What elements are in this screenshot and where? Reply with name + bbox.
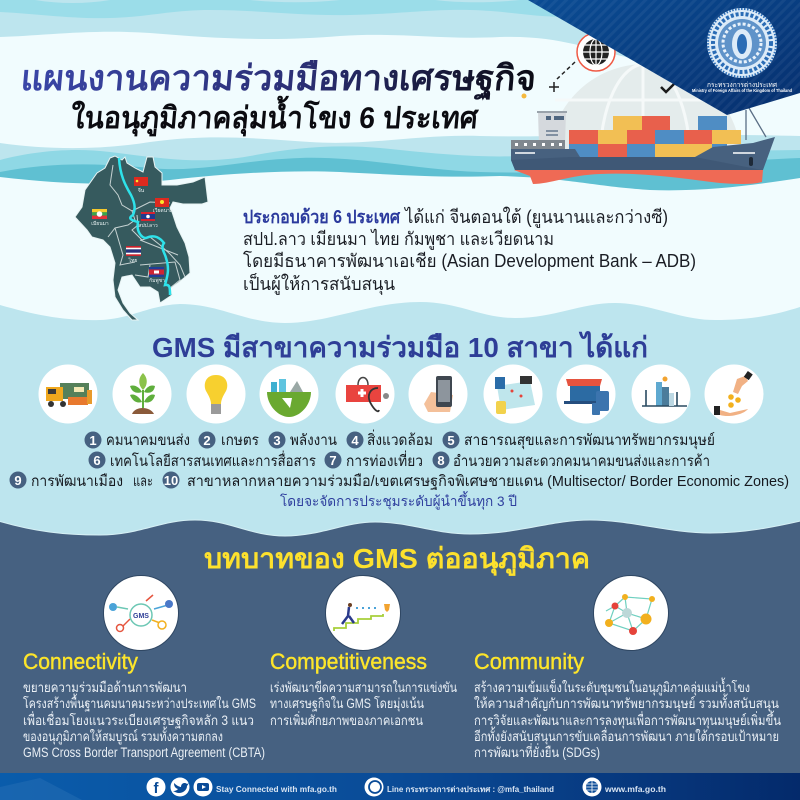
website: www.mfa.go.th	[604, 785, 666, 794]
ministry name	[692, 82, 792, 93]
icon: check	[661, 84, 674, 92]
top waves	[0, 0, 800, 60]
icon: health	[336, 364, 394, 424]
icon: tourism	[484, 364, 542, 424]
competitiveness body	[270, 679, 457, 728]
ministry seal	[707, 8, 777, 78]
yellow dot	[522, 94, 526, 98]
icon: urban	[632, 364, 690, 424]
ship	[511, 108, 775, 184]
community body	[474, 677, 781, 760]
competitiveness body: การเพิ่มศักยภาพของภาคเอกชน	[270, 711, 423, 728]
line 1: 4	[351, 433, 359, 448]
summit note: โดยจะจัดการประชุมระดับผู้นำขึ้นทุก 3 ปี	[280, 491, 517, 510]
line 1	[84, 429, 715, 450]
line 1: เกษตร	[221, 432, 259, 449]
connectivity body: ขยายความร่วมมือด้านการพัฒนา	[23, 680, 187, 695]
connectivity body	[23, 680, 265, 760]
panel: community	[474, 576, 781, 760]
ship bridge	[511, 111, 567, 149]
icon: line	[364, 778, 384, 796]
icon: globe badge	[577, 33, 615, 71]
flag: China	[134, 177, 148, 186]
icon: trade	[556, 364, 616, 424]
connector dashes	[549, 62, 575, 92]
line 2	[88, 450, 710, 470]
line 3: สาขาหลากหลายความร่วมมือ/เขตเศรษฐกิจพิเศษชายแดน (Multisector/ Border Economic Zones)	[187, 473, 789, 490]
map of GMS: จีน	[138, 187, 145, 194]
flag: Laos	[141, 212, 155, 221]
line 1: 1	[89, 433, 97, 448]
sector icons	[38, 364, 764, 424]
line 3: 10	[164, 473, 178, 488]
borders	[108, 165, 185, 288]
title: community: Community	[474, 649, 584, 674]
connectivity body: ของอนุภูมิภาคให้สมบูรณ์ รวมทั้งความตกลง	[23, 726, 223, 745]
line 1: 3	[273, 433, 281, 448]
connectivity body: GMS Cross Border Transport Agreement (CBTA)	[23, 745, 265, 760]
map of GMS: สปป.ลาว	[138, 223, 158, 229]
icon: facebook	[146, 778, 166, 797]
icon: climbing to trophy	[326, 576, 400, 650]
line 2: เทคโนโลยีสารสนเทศและการสื่อสาร	[110, 450, 316, 470]
icon: network	[104, 576, 178, 650]
icon: youtube	[194, 778, 212, 796]
connectivity body: เพื่อเชื่อมโยงแนวระเบียงเศรษฐกิจหลัก 3 แนว	[23, 711, 254, 729]
title: แผนงานความร่วมมือทางเศรษฐกิจ	[19, 59, 538, 101]
title: connectivity: Connectivity	[23, 649, 138, 674]
dark section	[0, 520, 800, 785]
line 2: การท่องเที่ยว	[346, 450, 423, 470]
line 1: สาธารณสุขและการพัฒนาทรัพยากรมนุษย์	[464, 432, 715, 450]
intro text	[243, 206, 696, 295]
intro text: ได้แก่ จีนตอนใต้ (ยูนนานและกว่างซี)	[403, 206, 668, 228]
heading: GMS role: บทบาทของ GMS ต่ออนุภูมิภาค	[204, 543, 590, 576]
title	[19, 59, 538, 137]
line 2: 8	[437, 453, 445, 468]
icon: ICT	[408, 364, 468, 424]
icon: people network	[594, 576, 668, 650]
lower title waves	[0, 135, 800, 320]
line 1: 2	[203, 433, 211, 448]
icon: facebook: f	[154, 780, 160, 797]
community body: การพัฒนาที่ยั่งยืน (SDGs)	[474, 743, 600, 760]
intro text: ประกอบด้วย 6 ประเทศ	[243, 207, 401, 227]
competitiveness body: ทางเศรษฐกิจใน GMS โดยมุ่งเน้น	[270, 695, 424, 712]
icon: network: GMS	[133, 613, 149, 620]
panel: connectivity	[23, 576, 265, 760]
icon: twitter	[170, 778, 190, 796]
ministry corner	[528, 0, 800, 115]
line 3: และ	[133, 473, 153, 490]
heading: ten sectors: GMS มีสาขาความร่วมมือ 10 สาขา ได้แก่	[152, 331, 648, 363]
map of GMS: เมียนมา	[91, 220, 109, 227]
icon: agriculture	[112, 364, 172, 424]
line 3: 9	[14, 473, 22, 488]
icon: environment	[260, 364, 318, 424]
line 3: การพัฒนาเมือง	[31, 473, 123, 490]
map of GMS	[75, 156, 208, 320]
map of GMS: เวียดนาม	[153, 207, 173, 214]
river	[119, 158, 170, 295]
ministry name: กระทรวงการต่างประเทศ	[707, 82, 778, 89]
flag: Myanmar	[92, 209, 107, 219]
globe backdrop	[562, 64, 740, 149]
icon: web	[582, 778, 602, 796]
panel: competitiveness	[270, 576, 457, 728]
line 2: อำนวยความสะดวกคมนาคมขนส่งและการค้า	[453, 453, 710, 470]
title: competitiveness: Competitiveness	[270, 649, 427, 674]
flag: Thailand	[126, 246, 141, 256]
intro text: เป็นผู้ให้การสนับสนุน	[243, 272, 395, 295]
flag: Vietnam	[155, 198, 169, 207]
competitiveness body: เร่งพัฒนาขีดความสามารถในการแข่งขัน	[270, 679, 457, 695]
hull	[511, 137, 775, 170]
line 1: สิ่งแวดล้อม	[367, 429, 433, 449]
connectivity body: โครงสร้างพื้นฐานคมนาคมระหว่างประเทศใน GMS	[23, 693, 256, 712]
map of GMS: กัมพูชา	[149, 278, 165, 284]
icon: multisector	[704, 364, 764, 424]
flag: Cambodia	[149, 267, 164, 277]
line 1: คมนาคมขนส่ง	[106, 432, 190, 449]
intro text: สปป.ลาว เมียนมา ไทย กัมพูชา และเวียดนาม	[243, 228, 554, 250]
line 2: 6	[93, 453, 101, 468]
icon: energy	[186, 364, 246, 424]
icon: transport	[38, 364, 98, 424]
sector list	[10, 429, 789, 510]
title: ในอนุภูมิภาคลุ่มน้ำโขง 6 ประเทศ	[69, 95, 481, 137]
line 2: 7	[329, 453, 337, 468]
footer	[0, 773, 800, 800]
mast	[746, 108, 766, 140]
line 1: 5	[447, 433, 455, 448]
line account: Line กระทรวงการต่างประเทศ : @mfa_thailand	[387, 785, 554, 794]
intro text: โดยมีธนาคารพัฒนาเอเชีย (Asian Development Bank – ADB)	[243, 250, 696, 271]
stay connected: Stay Connected with mfa.go.th	[216, 785, 337, 794]
containers	[569, 116, 741, 158]
line 1: พลังงาน	[290, 432, 337, 449]
map of GMS: ไทย	[128, 257, 137, 264]
mid blue section	[0, 302, 800, 540]
